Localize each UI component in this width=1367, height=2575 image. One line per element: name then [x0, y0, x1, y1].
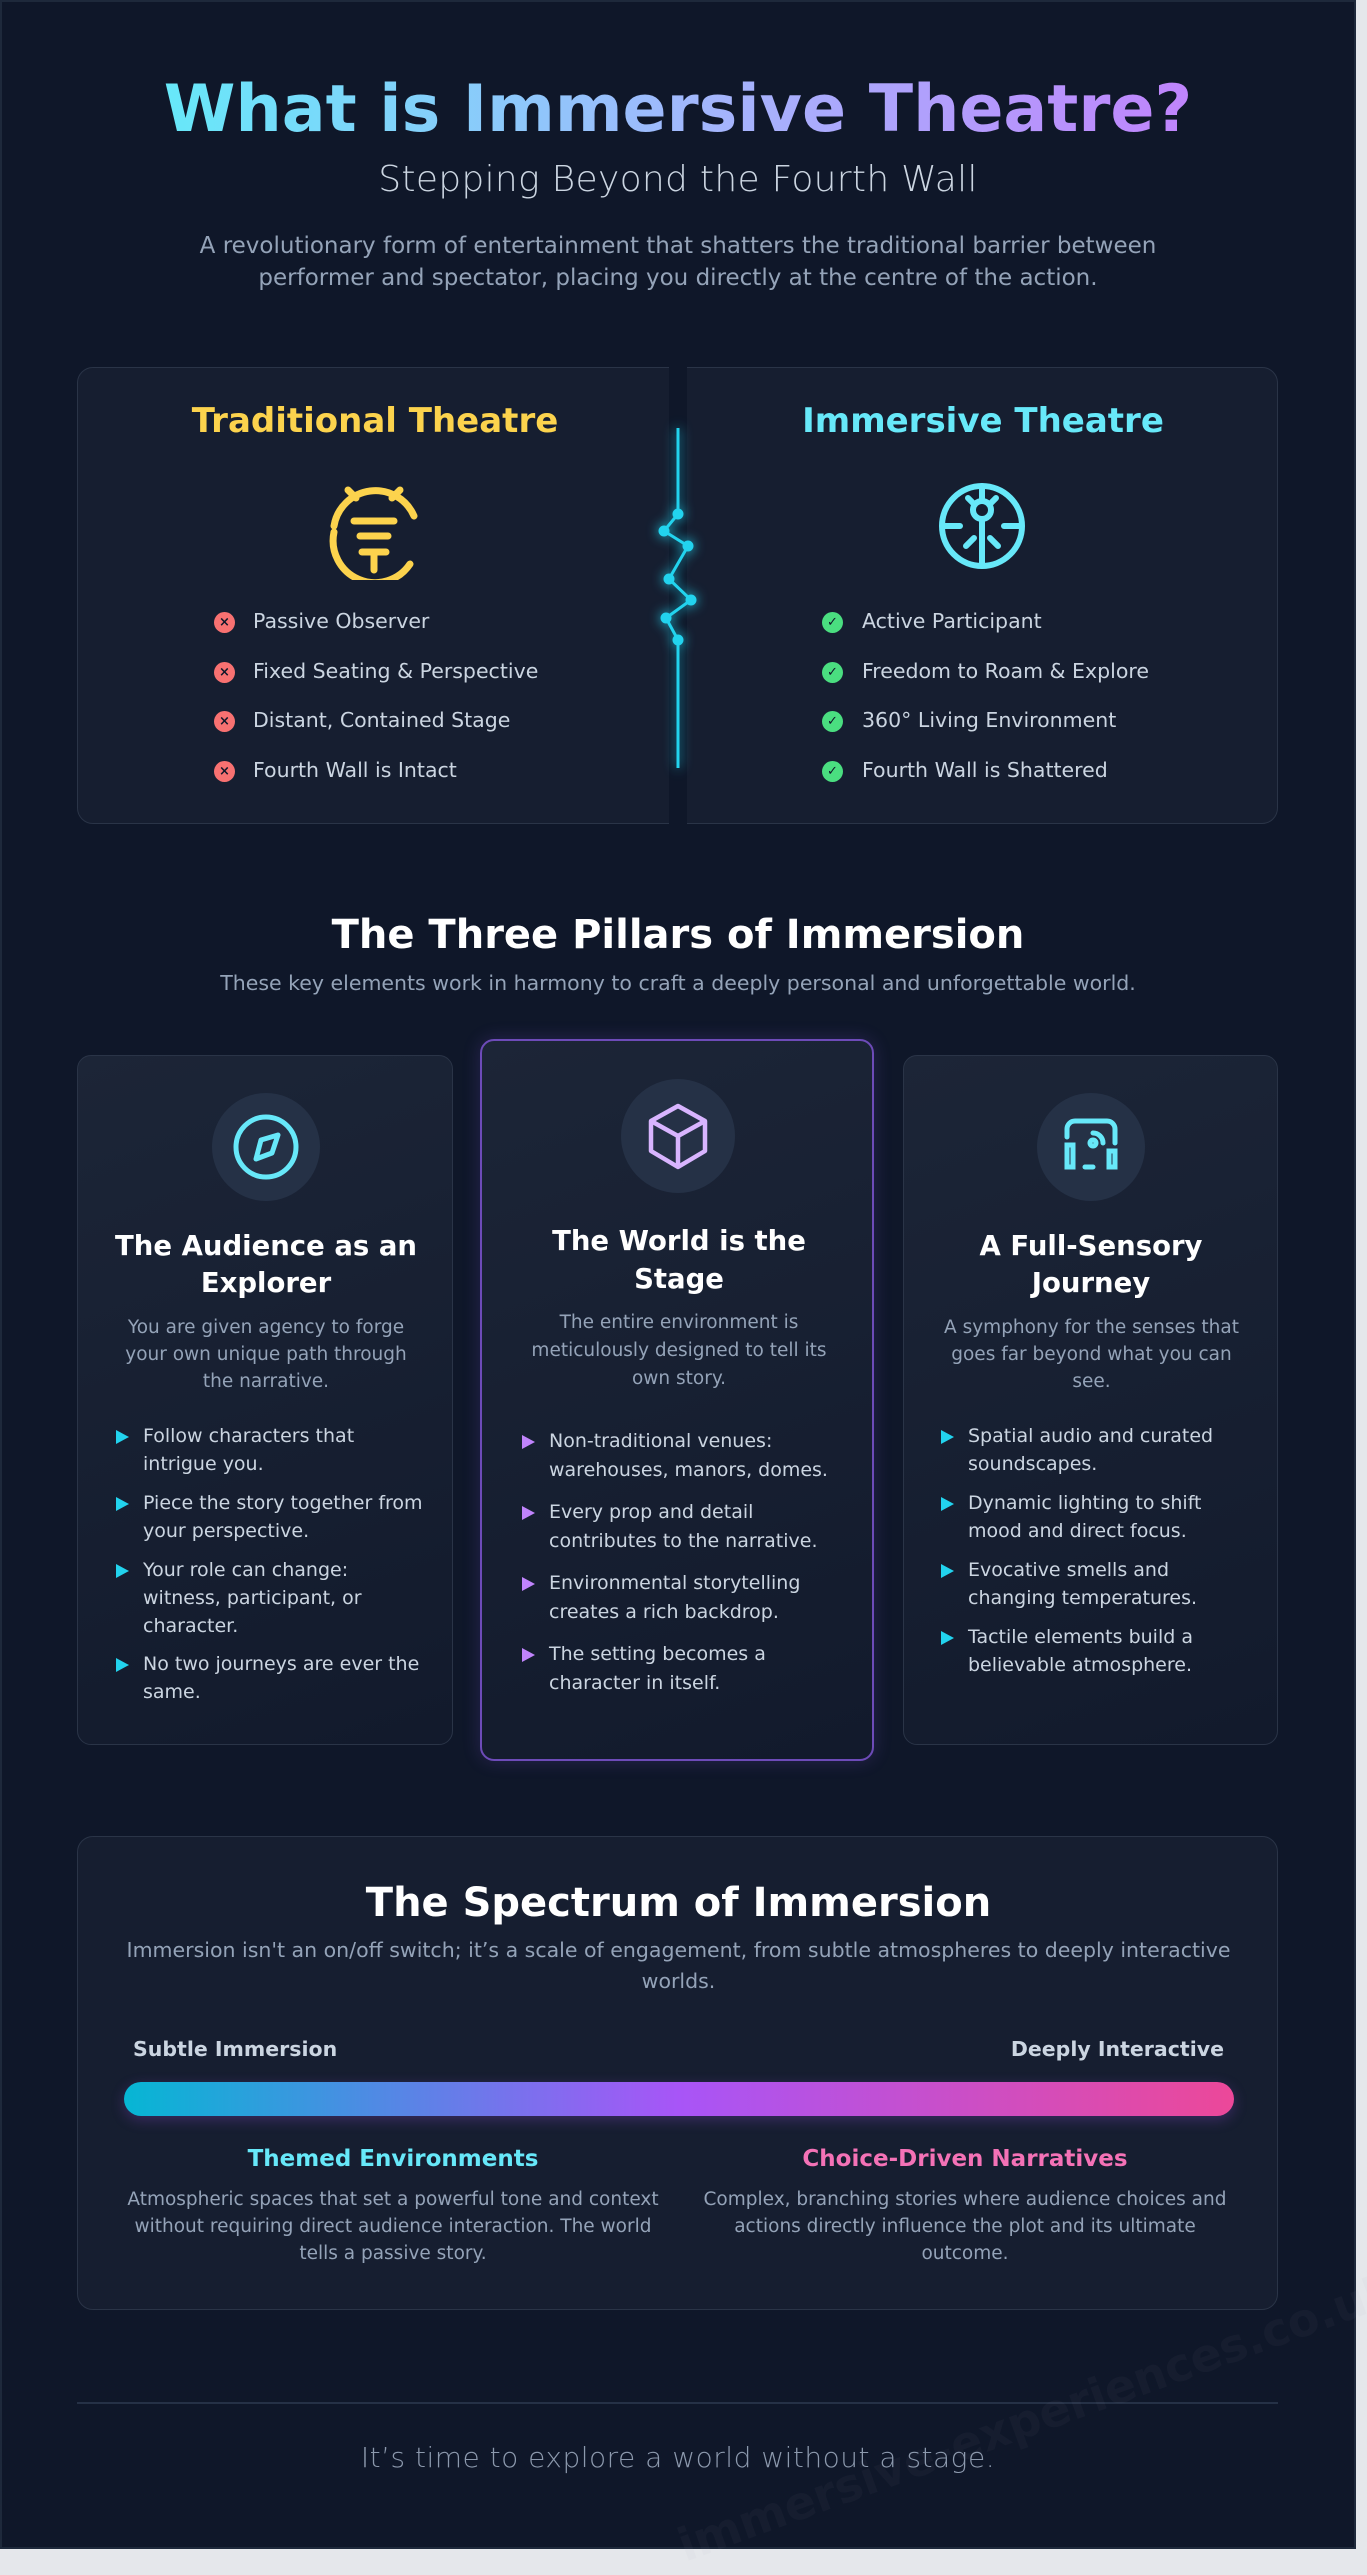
card description: A symphony for the senses that goes far beyond what you can see.	[944, 1317, 1239, 1392]
heading: pillars: The Three Pillars of Immersion	[332, 912, 1024, 958]
list: traditional: Passive Observer	[253, 609, 429, 633]
list: immersive	[822, 609, 1149, 782]
list: traditional: ×	[219, 665, 230, 680]
list: traditional: ×	[219, 615, 230, 630]
themed environments: Atmospheric spaces that set a powerful tone and context without requiring direct audience interaction. The world tells a passive story.	[127, 2189, 659, 2264]
panel: spectrum	[77, 1836, 1278, 2310]
themed environments	[127, 2146, 659, 2264]
list: traditional: ×	[219, 764, 230, 779]
bullets: No two journeys are ever the same.	[143, 1653, 419, 1703]
list: immersive: Freedom to Roam & Explore	[862, 659, 1149, 683]
icon: compass	[212, 1093, 320, 1201]
bullets: Piece the story together from your perspective.	[143, 1492, 423, 1542]
title: What is Immersive Theatre?	[164, 72, 1192, 147]
heading: traditional: Traditional Theatre	[192, 401, 558, 441]
spectrum description: Immersion isn't an on/off switch; it’s a scale of engagement, from subtle atmospheres to deeply interactive worlds.	[127, 1938, 1230, 1993]
card description: You are given agency to forge your own unique path through the narrative.	[125, 1317, 407, 1392]
divider strip	[669, 366, 687, 825]
card title: The Audience as an Explorer	[115, 1230, 417, 1299]
gradient bar	[124, 2082, 1234, 2116]
list: immersive: ✓	[827, 714, 838, 729]
bullets: Tactile elements build a believable atmosphere.	[968, 1626, 1193, 1676]
list: traditional: Distant, Contained Stage	[253, 708, 510, 732]
list: immersive: ✓	[827, 764, 838, 779]
themed environments: Themed Environments	[248, 2146, 538, 2172]
bullets: Follow characters that intrigue you.	[143, 1425, 354, 1475]
list: immersive: ✓	[827, 615, 838, 630]
icon: cube	[621, 1079, 735, 1193]
choice-driven narratives	[704, 2146, 1226, 2264]
subtitle: Stepping Beyond the Fourth Wall	[378, 159, 978, 200]
bullets	[941, 1425, 1213, 1676]
footer tagline: It’s time to explore a world without a stage.	[361, 2441, 995, 2474]
icon: sensory	[1037, 1093, 1145, 1201]
choice-driven narratives: Choice-Driven Narratives	[802, 2146, 1128, 2172]
list: traditional: Fourth Wall is Intact	[253, 758, 457, 782]
connector zigzag	[651, 424, 704, 772]
label: interactive: Deeply Interactive	[1011, 2037, 1224, 2061]
list: immersive: Fourth Wall is Shattered	[862, 758, 1108, 782]
card title: The World is the Stage	[552, 1225, 806, 1295]
bullets: Dynamic lighting to shift mood and direct focus.	[968, 1492, 1202, 1542]
bullets: Environmental storytelling creates a rich backdrop.	[549, 1572, 800, 1623]
icon: immersive 360	[939, 483, 1025, 569]
bullets: Evocative smells and changing temperatures.	[968, 1559, 1197, 1609]
panel: explorer card	[77, 1055, 453, 1745]
panel: sensory card	[903, 1055, 1278, 1745]
card title: A Full-Sensory Journey	[980, 1230, 1202, 1299]
list: traditional: ×	[219, 714, 230, 729]
list: traditional	[214, 609, 538, 782]
pillars subtitle: These key elements work in harmony to craft a deeply personal and unforgettable world.	[220, 971, 1136, 995]
bullets: The setting becomes a character in itself.	[549, 1643, 766, 1694]
list: traditional: Fixed Seating & Perspective	[253, 659, 538, 683]
card description: The entire environment is meticulously designed to tell its own story.	[531, 1312, 827, 1389]
panel: world card	[480, 1039, 874, 1761]
bullets: Non-traditional venues: warehouses, manors, domes.	[549, 1430, 828, 1481]
bullets: Your role can change: witness, participant, or character.	[143, 1559, 362, 1637]
choice-driven narratives: Complex, branching stories where audience choices and actions directly influence the plot and its ultimate outcome.	[704, 2189, 1226, 2264]
bullets	[116, 1425, 423, 1703]
intro text: A revolutionary form of entertainment that shatters the traditional barrier between performer and spectator, placing you directly at the centre of the action.	[200, 233, 1156, 291]
bullets: Spatial audio and curated soundscapes.	[968, 1425, 1213, 1475]
spectrum title: The Spectrum of Immersion	[366, 1880, 991, 1926]
panel: comparison	[77, 367, 1278, 824]
icon: traditional stage	[330, 486, 418, 580]
bullets: Every prop and detail contributes to the narrative.	[549, 1501, 818, 1552]
list: immersive: Active Participant	[862, 609, 1042, 633]
bullets	[522, 1430, 828, 1694]
list: immersive: 360° Living Environment	[862, 708, 1116, 732]
heading: immersive: Immersive Theatre	[802, 401, 1164, 441]
list: immersive: ✓	[827, 665, 838, 680]
label: subtle: Subtle Immersion	[133, 2037, 337, 2061]
